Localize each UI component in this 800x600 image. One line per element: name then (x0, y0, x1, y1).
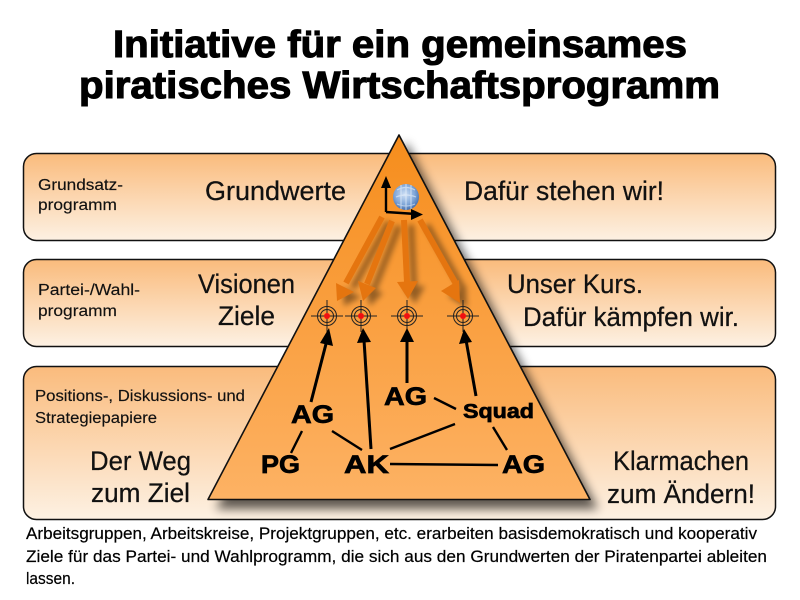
label: Grundsatzprogramm: Grundsatz- (38, 177, 123, 194)
node: Squad: Squad (463, 401, 534, 423)
icon: target 3 (391, 300, 423, 332)
pyramid shadow (216, 142, 598, 509)
node: AG right: AG (502, 451, 545, 479)
heading: Visionen Ziele: Ziele (218, 301, 275, 331)
panel: Positions-, Diskussions- und Strategiepapiere (24, 366, 776, 520)
footer text (26, 525, 767, 588)
icon: target 4 (447, 300, 479, 332)
text: Der Weg zum Ziel: zum Ziel (91, 478, 190, 508)
text: Klarmachen zum Ändern: Klarmachen (613, 446, 749, 476)
node: AK: AK (344, 451, 389, 479)
panel: Grundsatzprogramm (24, 154, 776, 240)
footer text: Ziele für das Partei- und Wahlprogramm, die sich aus den Grundwerten der Piratenpartei ableiten (26, 548, 767, 566)
pyramid (208, 135, 590, 500)
node: AG: AG (291, 401, 334, 429)
text: Dafür stehen wir: Dafür stehen wir! (464, 176, 664, 206)
label: Partei-/Wahlprogramm: Partei-/Wahl- (38, 282, 140, 299)
orange arrows: values to goals (336, 217, 467, 308)
text: Klarmachen zum Ändern: zum Ändern! (607, 479, 755, 509)
panel: Partei- und Wahlprogramm (24, 260, 776, 346)
text: Der Weg zum Ziel (90, 446, 191, 508)
network connections (291, 398, 507, 465)
label: Positionspapiere: Strategiepapiere (35, 410, 157, 427)
heading: Visionen Ziele (198, 269, 295, 331)
title: Initiative für ein gemeinsames (113, 24, 687, 66)
icon: target 2 (345, 300, 377, 332)
icon: target 1 (311, 300, 343, 332)
footer text: Arbeitsgruppen, Arbeitskreise, Projektgruppen, etc. erarbeiten basisdemokratisch und kooperativ (26, 525, 758, 543)
text: Der Weg zum Ziel: Der Weg (90, 446, 191, 476)
title (79, 24, 720, 107)
label: Partei-/Wahlprogramm (38, 282, 140, 320)
node: AG upper: AG (384, 383, 427, 411)
heading: Grundwerte: Grundwerte (205, 176, 346, 206)
title: piratisches Wirtschaftsprogramm (79, 65, 720, 107)
text: Unser Kurs: Unser Kurs. (507, 269, 643, 299)
label: Positionspapiere: Positions-, Diskussions- und (35, 388, 245, 405)
node: PG: PG (261, 451, 300, 479)
text: Unser Kurs: Dafür kämpfen wir. (523, 302, 739, 332)
text: Klarmachen zum Ändern (607, 446, 755, 509)
icon: globe with axes (381, 176, 423, 220)
footer text: lassen. (26, 570, 75, 588)
text: Unser Kurs (507, 269, 739, 332)
heading: Visionen Ziele: Visionen (198, 269, 295, 299)
label: Positionspapiere (35, 388, 245, 427)
label: Partei-/Wahlprogramm: programm (38, 303, 117, 320)
black arrows to targets (311, 328, 476, 449)
label: Grundsatzprogramm: programm (38, 197, 117, 214)
label: Grundsatzprogramm (38, 177, 123, 214)
